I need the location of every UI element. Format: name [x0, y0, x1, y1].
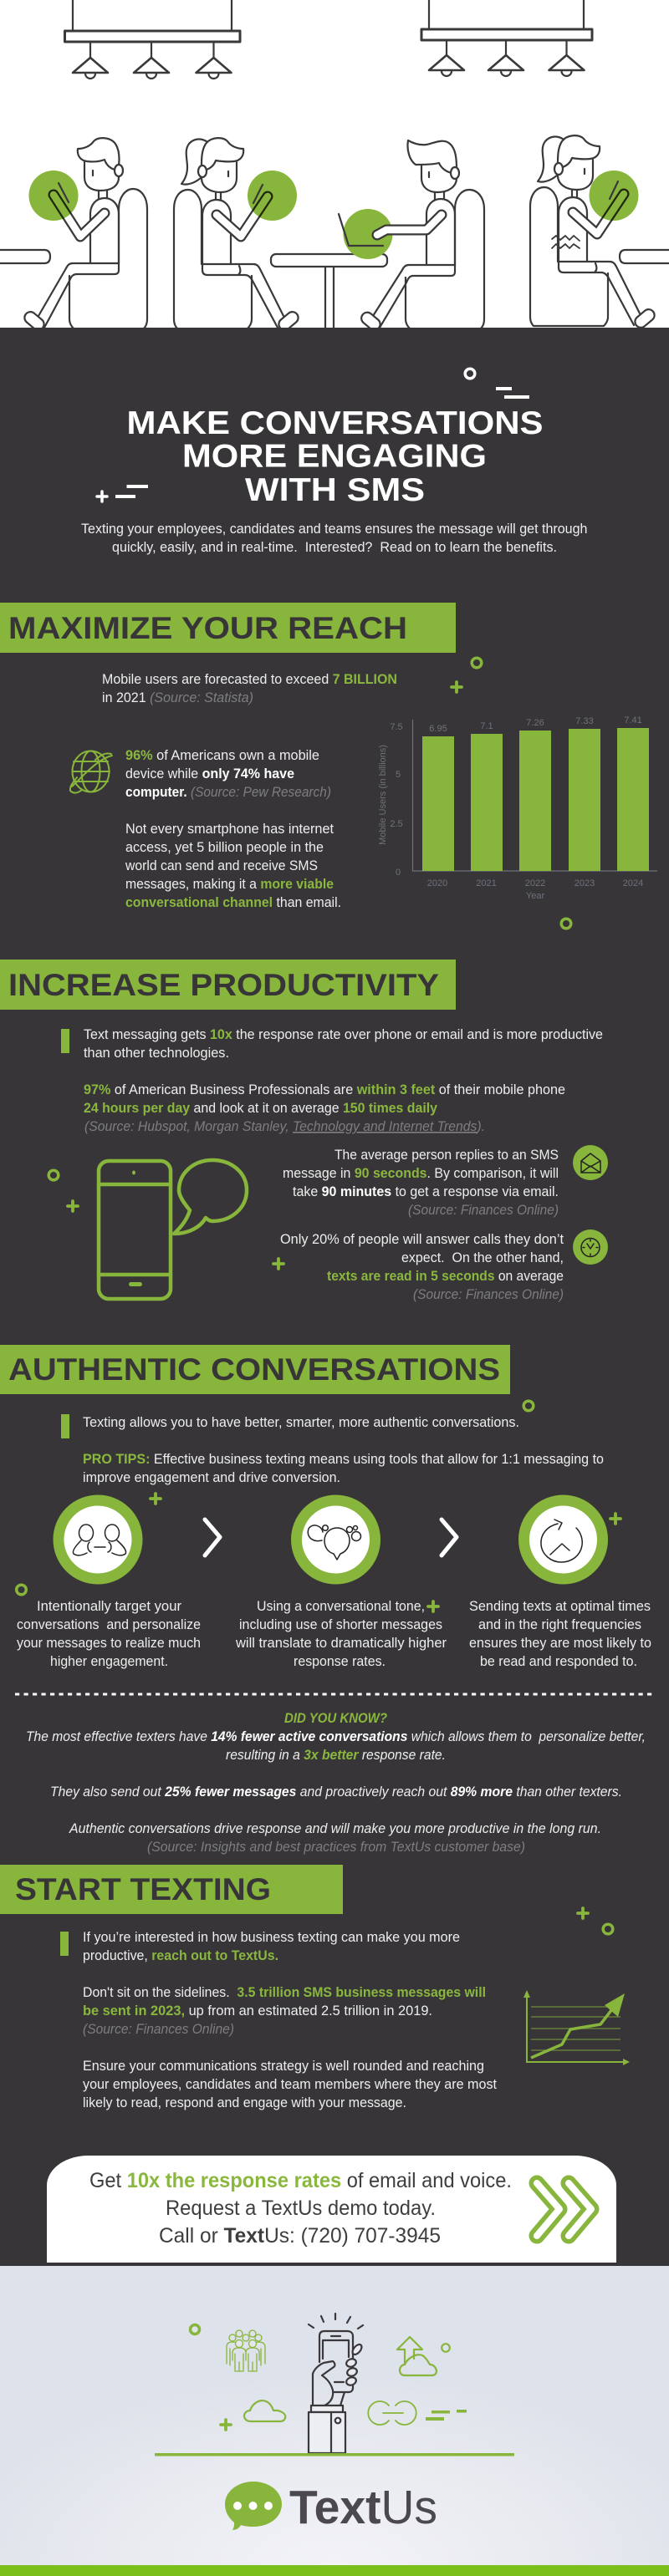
- icon: people connected: [59, 1500, 137, 1579]
- ground line: [155, 2453, 514, 2456]
- heading banner: MAXIMIZE YOUR REACH: [8, 611, 407, 645]
- bar chart: mobile users: 0: [396, 868, 401, 878]
- bar chart: mobile users: [378, 715, 657, 901]
- arrow: [205, 1520, 220, 1555]
- title: MORE ENGAGING: [182, 438, 487, 475]
- logo speech bubble: [225, 2482, 282, 2530]
- statistic: 7 billion: Mobile users are forecasted to exceed 7 BILLION: [102, 672, 397, 687]
- text: column 2: [235, 1599, 447, 1669]
- bar chart: mobile users: 7.1: [480, 721, 493, 731]
- bar chart: mobile users: 7.33: [575, 716, 594, 726]
- icon: hand holding smartphone: [309, 2314, 364, 2453]
- section: start texting: [0, 1865, 630, 2263]
- heading banner: [0, 960, 456, 1010]
- statistic: 96 percent: device while only 74% have: [125, 766, 294, 781]
- text: column 3: ensures they are most likely to: [469, 1636, 651, 1651]
- statistic: 96 percent: 96% of Americans own a mobile: [125, 748, 319, 763]
- statistic: 7 billion: in 2021 (Source: Statista): [102, 690, 253, 705]
- text: sms reach: messages, making it a more viable: [125, 877, 334, 892]
- section: maximize your reach: [0, 603, 657, 929]
- text: 3.5 trillion: (Source: Finances Online): [83, 2022, 234, 2037]
- text: response rate: Text messaging gets 10x the response rate over phone or email and is more productive: [84, 1027, 603, 1042]
- decor plus: [273, 1259, 283, 1269]
- decor plus: [221, 2420, 231, 2430]
- bar chart: mobile users: 2024: [623, 878, 643, 888]
- hanging sign with lamps, left: [65, 0, 240, 79]
- heading banner: [0, 603, 456, 653]
- text: 3.5 trillion: Don't sit on the sidelines. 3.5 trillion SMS business messages will: [83, 1985, 486, 2000]
- icon: cloud: [244, 2400, 285, 2421]
- text: 90 seconds: [283, 1148, 559, 1218]
- icon: link: [368, 2401, 416, 2425]
- decor ring: [442, 2344, 450, 2352]
- text: pro tips: [83, 1452, 604, 1485]
- hero section: [81, 369, 587, 555]
- bar chart: mobile users: 2020: [427, 878, 447, 888]
- bar chart: mobile users: 6.95: [429, 724, 447, 734]
- icon: clock: [573, 1229, 608, 1265]
- icon: growth chart: [523, 1990, 630, 2065]
- cta text: Call or TextUs: (720) 707-3945: [159, 2224, 441, 2248]
- cta text: Get 10x the response rates of email and voice.: [89, 2169, 512, 2192]
- heading banner: [0, 1345, 510, 1394]
- bar chart: mobile users: 2021: [476, 878, 497, 888]
- bar chart: mobile users: 7.5: [390, 722, 403, 732]
- callout: did you know: resulting in a 3x better response rate.: [226, 1748, 446, 1763]
- decor plus: [610, 1514, 620, 1524]
- text: column 2: will translate to dramatically higher: [235, 1636, 447, 1651]
- decor plus: [578, 1908, 588, 1918]
- bar chart: mobile users: 2023: [575, 878, 595, 888]
- icon: optimal timing cycle: [523, 1500, 602, 1579]
- callout: did you know: (Source: Insights and best practices from TextUs customer base): [147, 1840, 525, 1855]
- text: 3.5 trillion: be sent in 2023, up from an estimated 2.5 trillion in 2019.: [83, 2003, 432, 2019]
- heading banner: INCREASE PRODUCTIVITY: [8, 968, 439, 1002]
- arrow: [442, 1520, 457, 1555]
- bar chart: mobile users: 7.41: [624, 715, 642, 725]
- decor ring: [561, 919, 571, 929]
- text: sms reach: access, yet 5 billion people in the: [125, 840, 324, 855]
- text: sms reach: [125, 822, 341, 910]
- text: response rate: [84, 1027, 603, 1061]
- callout: did you know: They also send out 25% fewer messages and proactively reach out 89% more than other texters.: [50, 1784, 622, 1800]
- text: pro tips: PRO TIPS: Effective business texting means using tools that allow for 1:1 messaging to: [83, 1452, 604, 1467]
- title: MAKE CONVERSATIONS: [127, 405, 544, 441]
- person 4 with phone: [530, 135, 656, 330]
- callout: did you know: The most effective texters have 14% fewer active conversations which allows them to personalize better,: [26, 1729, 646, 1744]
- text: authentic intro: Texting allows you to have better, smarter, more authentic conversations.: [83, 1415, 519, 1430]
- center table: [271, 254, 387, 328]
- text: reach out: If you’re interested in how business texting can make you more: [83, 1930, 460, 1945]
- text: strategy: [83, 2059, 497, 2110]
- callout: did you know: [26, 1711, 646, 1855]
- text: 5 seconds: (Source: Finances Online): [413, 1287, 564, 1302]
- dark main background panel: [0, 328, 669, 2266]
- heading banner: START TEXTING: [15, 1872, 271, 1907]
- footer green bar: [0, 2565, 669, 2576]
- person 3 with laptop: [339, 140, 484, 333]
- section: authentic conversations: [0, 1345, 656, 1855]
- text: column 1: your messages to realize much: [17, 1636, 201, 1651]
- heading banner: AUTHENTIC CONVERSATIONS: [8, 1352, 500, 1387]
- intro text: [81, 522, 587, 555]
- cta text: [89, 2169, 512, 2248]
- icon: conversation bubbles: [296, 1500, 375, 1579]
- text: strategy: Ensure your communications strategy is well rounded and reaching: [83, 2059, 484, 2074]
- text: column 3: and in the right frequencies: [478, 1617, 641, 1632]
- icon: crowd of people: [227, 2330, 265, 2371]
- text: 5 seconds: Only 20% of people will answer calls they don’t: [280, 1232, 564, 1247]
- decor dashes: [426, 2410, 467, 2421]
- bar chart: mobile users: 2022: [525, 878, 545, 888]
- intro text: quickly, easily, and in real-time. Interested? Read on to learn the benefits.: [112, 540, 557, 555]
- text: 90 seconds: take 90 minutes to get a response via email.: [293, 1184, 559, 1199]
- table stub, right: [620, 250, 669, 263]
- statistic: 96 percent: [125, 748, 331, 800]
- text: response rate: than other technologies.: [84, 1046, 229, 1061]
- text: column 3: be read and responded to.: [480, 1654, 637, 1669]
- decor plus: [452, 682, 462, 692]
- bar chart: mobile users: 5: [396, 770, 401, 780]
- section: increase productivity: [0, 960, 608, 1302]
- icon: arrow and cloud upload: [397, 2337, 437, 2375]
- text: column 2: Using a conversational tone,: [257, 1599, 425, 1614]
- decor: white ring and dashes: [465, 369, 529, 399]
- decor ring: [523, 1401, 534, 1411]
- text: column 2: response rates.: [294, 1654, 386, 1669]
- text: 90 seconds: (Source: Finances Online): [408, 1203, 559, 1218]
- decor ring: [17, 1585, 26, 1595]
- text: 90 seconds: The average person replies to an SMS: [334, 1148, 559, 1163]
- decor plus: [68, 1201, 78, 1211]
- title: WITH SMS: [245, 472, 425, 508]
- callout: did you know: Authentic conversations drive response and will make you more productive in the long run.: [69, 1821, 601, 1836]
- bar chart: mobile users: 2.5: [390, 819, 403, 829]
- text: strategy: your employees, candidates and team members where they are most: [83, 2077, 497, 2092]
- intro text: Texting your employees, candidates and teams ensures the message will get through: [81, 522, 587, 537]
- decor ring: [603, 1924, 613, 1934]
- text: strategy: likely to read, respond and engage with your message.: [83, 2095, 406, 2110]
- hanging sign with lamps, right: [421, 0, 592, 76]
- text: reach out: productive, reach out to TextUs.: [83, 1948, 278, 1963]
- text: column 1: conversations and personalize: [17, 1617, 201, 1632]
- decor: white plus and dashes: [97, 485, 148, 501]
- bar chart: mobile users: Mobile Users (in billions): [378, 745, 388, 845]
- text: 90 seconds: message in 90 seconds. By comparison, it will: [283, 1166, 559, 1181]
- text: 97 percent: (Source: Hubspot, Morgan Stanley, Technology and Internet Trends).: [84, 1119, 485, 1134]
- callout: did you know: DID YOU KNOW?: [284, 1711, 387, 1726]
- text: 5 seconds: texts are read in 5 seconds on average: [327, 1269, 564, 1284]
- bar chart: mobile users: Year: [526, 891, 544, 901]
- text: column 3: Sending texts at optimal times: [469, 1599, 651, 1614]
- logo: TextUs: [225, 2481, 437, 2534]
- text: 3.5 trillion: [83, 1985, 486, 2037]
- heading banner: [0, 1865, 343, 1914]
- decor ring: [191, 2325, 199, 2334]
- accent bar: [61, 1414, 69, 1438]
- title: [127, 405, 544, 508]
- text: column 3: [469, 1599, 651, 1669]
- person 2 with phone: [174, 138, 300, 333]
- footer panel: [0, 2266, 669, 2565]
- table stub, left: [0, 250, 50, 263]
- text: 5 seconds: [280, 1232, 564, 1302]
- logo wordmark: TextUs: [289, 2481, 437, 2534]
- statistic: 7 billion: [102, 672, 397, 705]
- call to action card: [47, 2156, 616, 2263]
- text: 5 seconds: expect. On the other hand,: [401, 1250, 564, 1265]
- accent bar: [61, 1029, 69, 1053]
- illustration: office scene with people texting: [0, 0, 669, 333]
- text: reach out: [83, 1930, 460, 1963]
- accent bar: [60, 1932, 69, 1956]
- text: 97 percent: 97% of American Business Professionals are within 3 feet of their mobile phone: [84, 1082, 565, 1097]
- bar chart: mobile users: 7.26: [526, 718, 544, 728]
- icon: globe: [70, 751, 112, 793]
- text: column 1: Intentionally target your: [37, 1599, 181, 1614]
- text: column 1: higher engagement.: [50, 1654, 168, 1669]
- person 1 with phone: [23, 138, 147, 333]
- text: column 2: including use of shorter messages: [239, 1617, 442, 1632]
- cta text: Request a TextUs demo today.: [166, 2197, 436, 2220]
- decor plus: [428, 1601, 438, 1611]
- text: 97 percent: [84, 1082, 565, 1134]
- text: sms reach: Not every smartphone has internet: [125, 822, 334, 837]
- text: sms reach: conversational channel than email.: [125, 895, 341, 910]
- icon: phone with speech bubble: [99, 1160, 247, 1299]
- statistic: 96 percent: computer. (Source: Pew Research): [125, 785, 331, 800]
- text: column 1: [17, 1599, 201, 1669]
- text: pro tips: improve engagement and drive conversion.: [83, 1470, 340, 1485]
- decor plus: [151, 1494, 161, 1504]
- text: sms reach: world can send and receive SMS: [125, 858, 318, 873]
- decor ring: [49, 1170, 59, 1180]
- text: 97 percent: 24 hours per day and look at it on average 150 times daily: [84, 1101, 438, 1116]
- icon: double chevron: [537, 2183, 591, 2236]
- icon: envelope: [573, 1145, 608, 1180]
- decor ring: [472, 658, 482, 668]
